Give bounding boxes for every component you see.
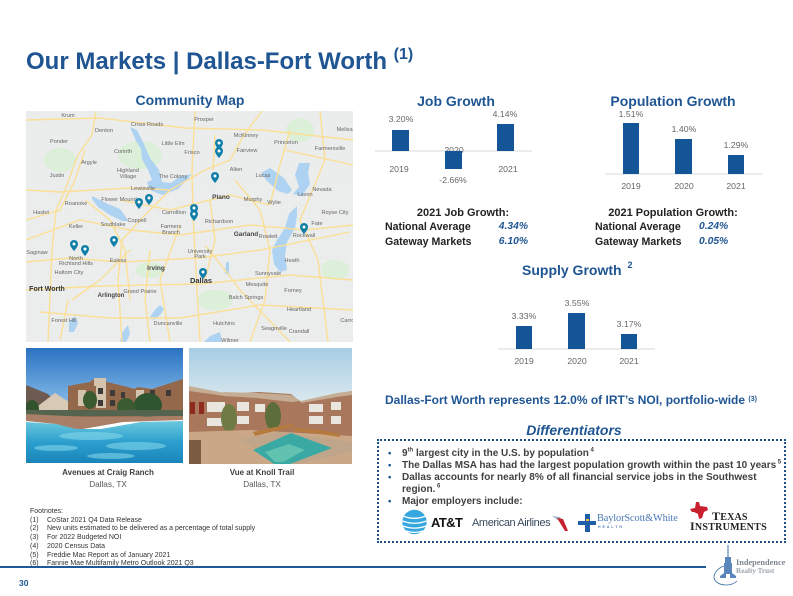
footnotes: (3) xyxy=(30,534,39,541)
differentiator bullets: • xyxy=(388,448,391,459)
map labels: Forney xyxy=(284,288,302,294)
map labels: Richardson xyxy=(205,219,233,225)
map labels: Heath xyxy=(285,258,299,264)
bar chart: job growth: -2.66% xyxy=(439,175,467,185)
map labels: The Colony xyxy=(159,174,188,180)
bar chart: population growth xyxy=(605,109,762,191)
logo: Independence Realty Trust: Realty Trust xyxy=(736,567,774,575)
map labels: Frisco xyxy=(184,150,200,156)
map labels: Ponder xyxy=(50,139,68,145)
footnotes: New units estimated to be delivered as a percentage of total supply xyxy=(47,525,255,532)
heading: community map: Community Map xyxy=(136,92,244,108)
bar chart: population growth: 1.40% xyxy=(672,124,697,134)
map labels: Arlington xyxy=(98,293,125,299)
map labels: Branch xyxy=(162,230,180,236)
footnotes: For 2022 Budgeted NOI xyxy=(47,534,121,541)
bar chart: population growth: 2019 xyxy=(621,181,641,191)
bar chart: supply growth: 2021 xyxy=(619,356,639,366)
map labels: North xyxy=(69,256,83,262)
map labels: Saginaw xyxy=(26,250,49,256)
map labels: Plano xyxy=(212,194,230,201)
logo: American Airlines: American Airlines xyxy=(472,517,550,529)
photo: Avenues at Craig Ranch xyxy=(26,348,183,463)
footnotes xyxy=(30,508,256,566)
map labels: Seagoville xyxy=(261,326,287,332)
page number: 30 xyxy=(19,578,28,588)
map labels: Nevada xyxy=(312,187,333,193)
population growth comparison xyxy=(595,207,738,248)
map labels: Lucas xyxy=(256,173,271,179)
logo: American Airlines xyxy=(472,516,568,531)
location: Dallas, TX xyxy=(243,480,281,489)
logo: AT&T: AT&T xyxy=(431,515,462,530)
map labels: Sunnyvale xyxy=(255,271,281,277)
map labels: Royse City xyxy=(321,210,349,216)
map labels: Village xyxy=(120,174,136,180)
job growth comparison: National Average xyxy=(385,221,471,233)
differentiator bullets: • xyxy=(388,472,391,483)
caption: Vue at Knoll Trail: Vue at Knoll Trail xyxy=(230,468,294,477)
footnotes: (1) xyxy=(30,517,39,524)
map labels: Highland xyxy=(117,168,139,174)
differentiator bullets: Major employers include: xyxy=(402,496,523,507)
heading: differentiators: Differentiators xyxy=(526,422,622,438)
bar chart: supply growth: 3.55% xyxy=(565,298,590,308)
roads xyxy=(26,111,353,342)
differentiator bullets: Dallas accounts for nearly 8% of all financial service jobs in the Southwest xyxy=(402,472,757,483)
bar chart: population growth: 2020 xyxy=(674,181,694,191)
logo: Baylor Scott & White: HEALTH xyxy=(598,525,624,529)
logo: Baylor Scott & White: BaylorScott&White xyxy=(597,513,678,524)
photo: Vue at Knoll Trail xyxy=(189,348,352,464)
population growth comparison: National Average xyxy=(595,221,681,233)
map labels: Wylie xyxy=(267,200,281,206)
footnotes: Freddie Mac Report as of January 2021 xyxy=(47,552,170,559)
map labels: Farmersville xyxy=(315,146,345,152)
job growth comparison xyxy=(385,207,528,248)
logo: Texas Instruments: INSTRUMENTS xyxy=(690,519,767,533)
bar chart: job growth: 2019 xyxy=(389,164,409,174)
map labels: Forest Hill xyxy=(51,318,77,324)
map labels xyxy=(26,113,356,344)
lakes xyxy=(69,127,310,342)
map labels: Lewisville xyxy=(131,186,155,192)
map labels: Rowlett xyxy=(259,234,278,240)
map labels: Park xyxy=(194,254,206,260)
map labels: Roanoke xyxy=(65,201,87,207)
differentiator bullets: The Dallas MSA has had the largest population growth within the past 10 years 5 xyxy=(402,460,781,471)
map labels: Justin xyxy=(50,173,64,179)
bar chart: supply growth: 3.33% xyxy=(512,311,537,321)
map labels: Haslet xyxy=(33,210,49,216)
map labels: Allen xyxy=(230,167,242,173)
map labels: Keller xyxy=(69,224,83,230)
portfolio statement: Dallas-Fort Worth represents 12.0% of IRT’s NOI, portfolio-wide (3) xyxy=(385,393,757,407)
map labels: Murphy xyxy=(244,197,263,203)
map labels: Euless xyxy=(110,258,127,264)
differentiator bullets: • xyxy=(388,496,391,507)
map labels: McKinney xyxy=(234,133,258,139)
footnotes: CoStar 2021 Q4 Data Release xyxy=(47,517,142,524)
map labels: Fate xyxy=(311,221,323,227)
community map xyxy=(26,111,353,342)
differentiator bullets: 9th largest city in the U.S. by population 4 xyxy=(402,448,594,459)
bar chart: population growth: 1.29% xyxy=(724,140,749,150)
bar chart: job growth xyxy=(375,109,532,185)
map labels: Garland xyxy=(234,231,258,238)
footnotes: (2) xyxy=(30,525,39,532)
map labels: Cross Roads xyxy=(131,122,163,128)
map pins xyxy=(70,139,308,279)
map labels: Krum xyxy=(61,113,75,119)
map labels: Mesquite xyxy=(246,282,268,288)
map labels: Dallas xyxy=(190,276,212,285)
map labels: Haltom City xyxy=(55,270,84,276)
map labels: Corinth xyxy=(114,149,132,155)
bar chart: supply growth: 2019 xyxy=(514,356,534,366)
job growth comparison: 2021 Job Growth: xyxy=(417,207,509,219)
job growth comparison: Gateway Markets xyxy=(385,236,472,248)
bar chart: job growth: 3.20% xyxy=(389,114,414,124)
panel: differentiators xyxy=(377,439,786,543)
heading: population growth: Population Growth xyxy=(610,93,736,109)
title: Our Markets | Dallas-Fort Worth (1) xyxy=(26,46,413,75)
logo: AT&T xyxy=(402,510,463,534)
map labels: Flower Mound xyxy=(101,197,137,203)
logo: Independence Realty Trust: Independence xyxy=(736,558,785,567)
location: Dallas, TX xyxy=(89,480,127,489)
map labels: Argyle xyxy=(81,160,97,166)
map labels: Crandall xyxy=(289,329,309,335)
differentiator bullets: • xyxy=(388,460,391,471)
map labels: University xyxy=(188,249,212,255)
map labels: Princeton xyxy=(274,140,298,146)
population growth comparison: 0.05% xyxy=(699,236,728,246)
differentiator bullets: region. 6 xyxy=(402,484,440,495)
map labels: Fort Worth xyxy=(29,286,65,293)
job growth comparison: 6.10% xyxy=(499,236,528,246)
map labels: Richland Hills xyxy=(59,261,93,267)
map labels: Carrollton xyxy=(162,210,186,216)
map labels: Grand Prairie xyxy=(123,289,157,295)
population growth comparison: 2021 Population Growth: xyxy=(608,207,738,219)
population growth comparison: Gateway Markets xyxy=(595,236,682,248)
bar chart: job growth: 4.14% xyxy=(493,109,518,119)
map labels: Denton xyxy=(95,128,113,134)
map labels: Lavon xyxy=(297,192,313,198)
logo: Texas Instruments: TEXAS xyxy=(712,509,748,523)
bar chart: population growth: 1.51% xyxy=(619,109,644,119)
job growth comparison: 4.34% xyxy=(499,221,528,232)
footnotes: 2020 Census Data xyxy=(47,543,105,550)
caption: Avenues at Craig Ranch: Avenues at Craig Ranch xyxy=(62,468,154,477)
bar chart: supply growth: 2020 xyxy=(567,356,587,366)
map labels: Southlake xyxy=(101,222,125,228)
map labels: Coppell xyxy=(128,218,146,224)
map labels: Balch Springs xyxy=(229,295,263,301)
footnotes: (4) xyxy=(30,543,39,550)
map labels: Farmers xyxy=(161,224,182,230)
map labels: Heartland xyxy=(287,307,311,313)
bar chart: supply growth xyxy=(498,298,655,366)
map labels: Irving xyxy=(147,265,165,272)
map labels: Prosper xyxy=(194,117,214,123)
logo: Independence Realty Trust xyxy=(714,545,786,586)
logo: Texas Instruments xyxy=(690,502,767,533)
heading: job growth: Job Growth xyxy=(417,93,495,109)
bar chart: supply growth: 3.17% xyxy=(617,319,642,329)
map labels: Duncanville xyxy=(154,321,182,327)
footer rule xyxy=(0,566,706,568)
bar chart: job growth: 2020 xyxy=(444,145,464,155)
map labels: Fairview xyxy=(237,148,258,154)
logo: Baylor Scott & White xyxy=(578,513,678,532)
footnotes: (5) xyxy=(30,552,39,559)
bar chart: job growth: 2021 xyxy=(498,164,518,174)
map labels: Little Elm xyxy=(161,141,185,147)
footnotes: Footnotes: xyxy=(30,508,63,515)
heading: supply growth: Supply Growth 2 xyxy=(522,260,632,278)
map labels: Rockwall xyxy=(293,233,315,239)
bar chart: population growth: 2021 xyxy=(726,181,746,191)
map labels: Hutchins xyxy=(213,321,235,327)
population growth comparison: 0.24% xyxy=(699,221,728,232)
